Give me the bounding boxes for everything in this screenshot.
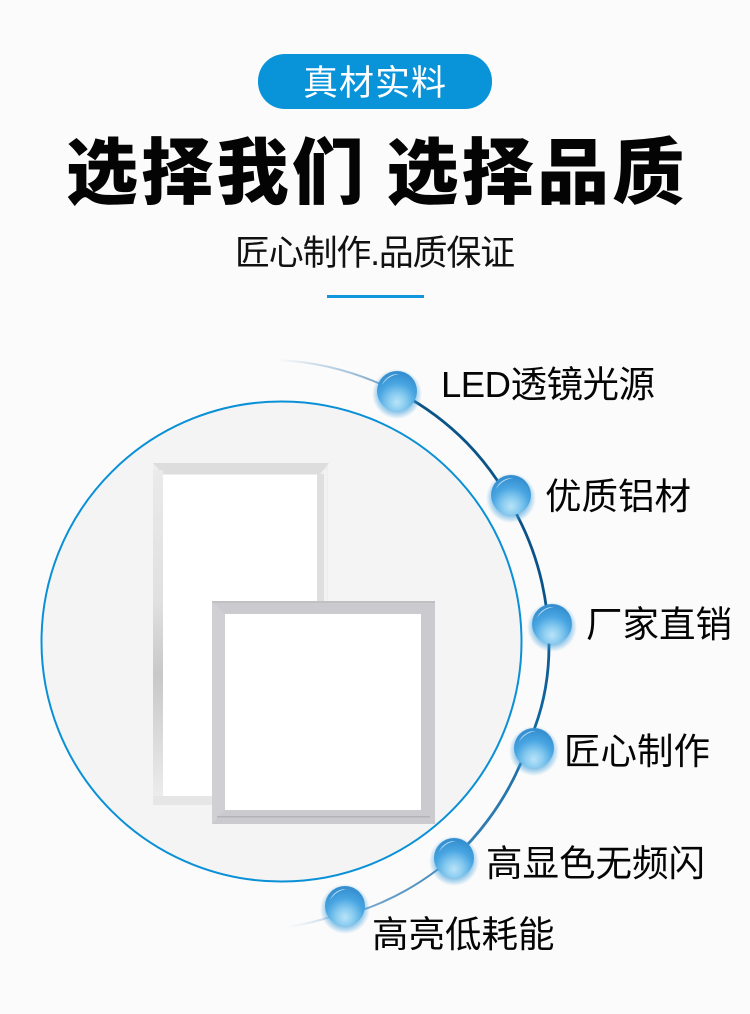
label: 高显色无频闪: 高显色无频闪 (486, 843, 705, 884)
bead: LED透镜光源 (372, 369, 422, 419)
square panel (212, 601, 435, 824)
subtitle: 匠心制作.品质保证 (235, 234, 514, 273)
rectangular panel (153, 463, 329, 805)
feature arc (277, 360, 549, 927)
title: 选择我们 选择品质 (66, 134, 688, 214)
product circle (42, 402, 522, 882)
label: 厂家直销: 厂家直销 (586, 604, 732, 645)
label: 匠心制作: 匠心制作 (564, 731, 710, 772)
bead: 厂家直销 (527, 602, 577, 652)
label: 高亮低耗能: 高亮低耗能 (372, 914, 554, 955)
bead: 优质铝材 (486, 473, 536, 523)
label: LED透镜光源: LED透镜光源 (441, 364, 655, 405)
bead: 匠心制作 (509, 726, 559, 776)
label: 优质铝材: 优质铝材 (545, 476, 691, 517)
badge: 真材实料 (258, 54, 492, 109)
bead: 高显色无频闪 (429, 836, 479, 886)
divider under subtitle (327, 295, 424, 298)
bead: 高亮低耗能 (320, 884, 370, 934)
badge: 真材实料: 真材实料 (303, 64, 447, 103)
